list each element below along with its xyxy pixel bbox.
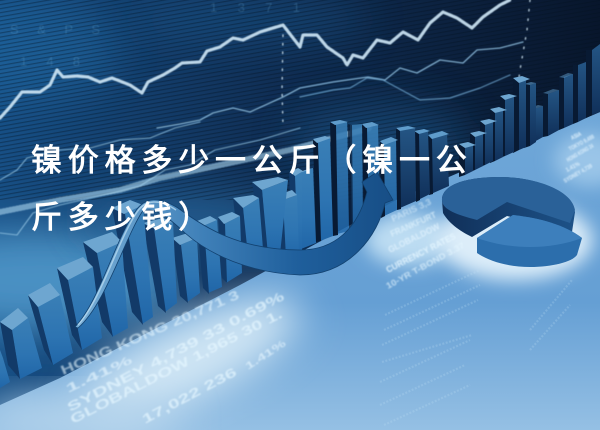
bar 332 bbox=[330, 120, 349, 236]
bar 417 bbox=[414, 129, 430, 202]
bar chart: right middle group bbox=[292, 120, 449, 249]
bar 590 bbox=[586, 44, 600, 118]
one point four: 1.41% bbox=[565, 161, 582, 174]
stock line charts bbox=[0, 0, 530, 235]
bar 397 bbox=[396, 126, 416, 210]
background ghost numbers: 1 3 7 1 bbox=[210, 0, 300, 15]
bar chart: left group bbox=[0, 168, 303, 388]
bar 460 bbox=[459, 142, 476, 177]
Frankfurt: FRANKFURT bbox=[389, 210, 438, 239]
Nikkei row: 17,022 236 bbox=[139, 364, 239, 427]
bar 9 bbox=[197, 216, 222, 294]
title line 1: 镍价格多少一公斤（镍一公 bbox=[31, 143, 473, 178]
background ghost numbers: 1 4 8 bbox=[20, 54, 80, 69]
Hong Kong row: HONG KONG 20,771 3 bbox=[58, 287, 241, 378]
title bbox=[31, 143, 473, 235]
bar 14 bbox=[289, 168, 303, 255]
bar 7 bbox=[143, 218, 177, 313]
bar 563 bbox=[559, 73, 573, 130]
Paris: PARIS 3,3 bbox=[390, 197, 433, 224]
bar 520 bbox=[524, 82, 536, 148]
Global Dow: GLOBALDOW bbox=[386, 221, 442, 255]
pie: main body bbox=[442, 177, 575, 237]
bar 300 bbox=[292, 168, 316, 249]
background ghost numbers bbox=[10, 0, 300, 69]
Asia: ASIA bbox=[570, 131, 583, 142]
bar 10 bbox=[218, 212, 242, 283]
candlestick price line bbox=[0, 0, 510, 118]
bar 547 bbox=[543, 89, 559, 137]
bar 5 bbox=[83, 232, 128, 337]
tick ladder bbox=[0, 128, 370, 212]
bar 448 bbox=[428, 131, 449, 195]
ribbon arrow bbox=[75, 172, 393, 328]
Sydney row: SYDNEY 4,739 33 0.69% bbox=[64, 288, 287, 415]
title line 2: 斤多少钱） bbox=[31, 200, 215, 235]
bar 12 bbox=[252, 177, 288, 256]
bar 363 bbox=[362, 122, 380, 225]
bar 3 bbox=[28, 283, 73, 365]
bar 1 bbox=[0, 350, 10, 388]
second trend line bbox=[157, 42, 523, 128]
bar 315 bbox=[313, 136, 333, 242]
bar 470 bbox=[470, 131, 487, 172]
bar 480 bbox=[480, 119, 497, 167]
Currency rates: CURRENCY RATES bbox=[384, 231, 458, 275]
bar 381 bbox=[380, 137, 398, 218]
background ghost numbers: S & P S bbox=[10, 22, 100, 37]
light reflective plane bbox=[0, 112, 600, 430]
percent row: 1.41% bbox=[63, 352, 135, 396]
bar 500 bbox=[500, 94, 517, 158]
percent row 2: 1.41% bbox=[244, 338, 288, 373]
bar 533 bbox=[530, 105, 543, 144]
slice top face bbox=[477, 215, 582, 247]
market text on plane bbox=[58, 131, 596, 427]
pie: top face bbox=[442, 177, 575, 223]
bar 13 bbox=[278, 190, 299, 258]
bar 490 bbox=[490, 107, 507, 163]
bar 11 bbox=[233, 195, 264, 265]
bar 6 bbox=[112, 200, 153, 325]
bar 2 bbox=[0, 308, 42, 379]
dotted axis bbox=[282, 35, 283, 125]
pie chart bbox=[442, 177, 582, 267]
bar 350 bbox=[348, 124, 363, 231]
left trend lines bbox=[0, 122, 200, 180]
bar 513 bbox=[513, 76, 530, 153]
T-bond: 10-YR T-BOND 3.37 bbox=[384, 240, 467, 291]
bar 8 bbox=[172, 233, 200, 303]
third trend line bbox=[300, 75, 510, 100]
bar chart: right back group bbox=[459, 44, 600, 177]
bar 577 bbox=[573, 62, 586, 124]
faint data rows bbox=[380, 270, 572, 425]
bar 4 bbox=[57, 257, 102, 350]
pie: separated slice bbox=[477, 215, 582, 267]
Global Dow row: GLOBALDOW 1,965 30 1. bbox=[68, 306, 285, 427]
